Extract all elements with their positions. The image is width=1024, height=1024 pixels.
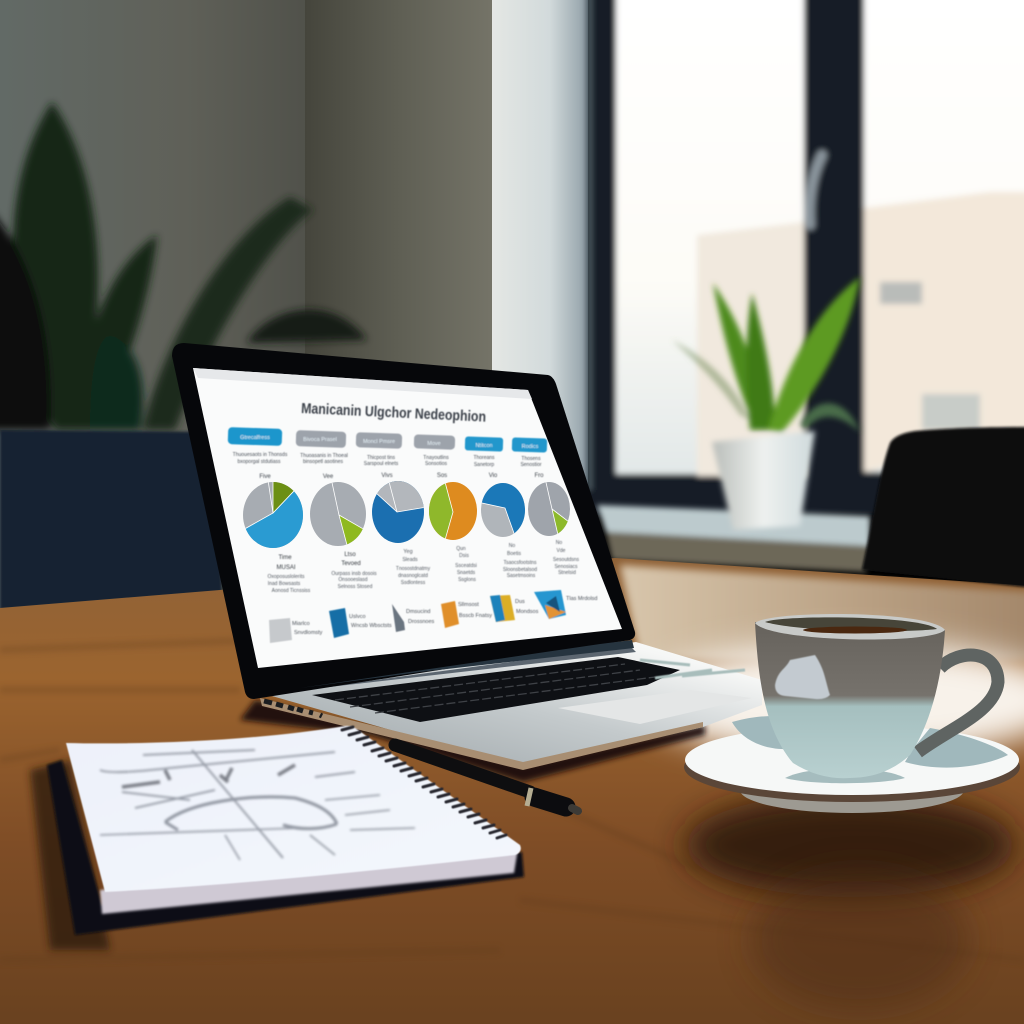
notebook page bbox=[66, 726, 521, 892]
laptop shadow bbox=[240, 700, 705, 782]
pie 6 bbox=[528, 482, 570, 536]
coffee cup and saucer bbox=[684, 614, 1020, 813]
cup reflection bbox=[775, 655, 830, 699]
laptop ports bbox=[264, 701, 322, 716]
pie descriptions: Fro bbox=[534, 473, 544, 479]
hinge bbox=[300, 646, 636, 690]
pie descriptions: Vivs bbox=[381, 473, 393, 479]
pie descriptions: Vio bbox=[489, 473, 498, 479]
icon: orange tile bbox=[441, 601, 459, 628]
window sill bbox=[597, 505, 870, 572]
laptop lid bbox=[172, 343, 635, 699]
cup interior bbox=[765, 617, 937, 631]
pie captions: Sesoutdsns bbox=[553, 557, 580, 563]
keyboard light keys bbox=[640, 660, 745, 678]
pie captions: Ssglons bbox=[458, 577, 476, 583]
pie captions: Stnelsid bbox=[558, 570, 576, 576]
icon: grey tile bbox=[269, 618, 292, 643]
pie descriptions bbox=[233, 452, 544, 480]
icon captions: Tlas Mrdolsd bbox=[566, 596, 597, 602]
window bbox=[586, 0, 1024, 515]
saucer shadow patches bbox=[732, 716, 1008, 768]
pie captions: Sloonsbetalsod bbox=[503, 567, 537, 573]
pie captions: Sleads bbox=[402, 557, 418, 563]
cup handle bbox=[918, 655, 998, 752]
pie descriptions: bxoporgal stdutiass bbox=[237, 459, 281, 465]
pie captions: Tsaocsfootstns bbox=[503, 560, 537, 566]
pie descriptions: Thoreans bbox=[473, 455, 495, 461]
icon: grey sail bbox=[392, 604, 405, 632]
pie captions: Senosiacs bbox=[554, 564, 578, 570]
chair back bbox=[862, 427, 1024, 588]
trackpad bbox=[558, 690, 752, 724]
notebook page edge bbox=[100, 848, 518, 914]
pie 5 bbox=[481, 483, 525, 537]
pie captions: No bbox=[556, 540, 562, 546]
category pills: Ntitcon bbox=[475, 443, 493, 449]
laptop bbox=[172, 343, 762, 770]
category pills bbox=[228, 427, 547, 453]
pie captions: Oxoposuslolerits bbox=[268, 574, 305, 580]
category pills: Moncl Pmsre bbox=[363, 439, 395, 445]
white pot bbox=[712, 431, 815, 530]
cup body bbox=[755, 622, 945, 778]
wooden table bbox=[0, 558, 1024, 1024]
pie captions: Inad Bowsasts bbox=[268, 581, 301, 587]
screen title: Manicanin Ulgchor Nedeophion bbox=[301, 400, 486, 426]
icon: blue tile bbox=[329, 608, 349, 638]
notebook shadow bbox=[30, 760, 110, 950]
pie captions: Selnoss Stosed bbox=[338, 584, 373, 590]
pie captions: Sasetmsoins bbox=[507, 573, 536, 579]
pie descriptions: Sarspoul elnets bbox=[364, 461, 399, 467]
pie captions: Aonosd Ticnssiss bbox=[272, 588, 311, 594]
pie captions: Ssdlontess bbox=[401, 580, 426, 586]
category pills: Gtrecalfress bbox=[240, 435, 270, 441]
pie descriptions: Five bbox=[259, 474, 271, 480]
icon captions: Bsscb Fnatsy bbox=[459, 613, 492, 619]
large plant bbox=[0, 102, 367, 430]
pie captions: Boetis bbox=[507, 551, 521, 557]
category pills: Move bbox=[427, 441, 441, 447]
pie descriptions: Thicpost tins bbox=[367, 455, 396, 461]
pie 1 bbox=[243, 482, 303, 548]
icon captions: Dus bbox=[515, 599, 525, 605]
icon captions: Wncsb Wbsctsts bbox=[351, 623, 392, 629]
pen bbox=[395, 745, 578, 811]
icon captions: Snvdlomsty bbox=[294, 630, 323, 636]
pie descriptions: binsopetl asotines bbox=[303, 459, 344, 465]
cup rim bbox=[755, 614, 945, 640]
pie captions: Tevoed bbox=[341, 561, 361, 567]
pie captions: No bbox=[509, 543, 515, 549]
spiral binding bbox=[342, 727, 506, 838]
pie descriptions: Thosens bbox=[521, 456, 541, 462]
bottom icons row bbox=[269, 590, 597, 643]
icon captions bbox=[292, 596, 597, 636]
pie 2 bbox=[310, 482, 366, 546]
pie captions: Vde bbox=[557, 548, 566, 554]
pie captions: Yeg bbox=[403, 549, 413, 555]
pie 4 bbox=[429, 482, 477, 540]
pie captions bbox=[268, 540, 580, 594]
dark planter bbox=[0, 430, 222, 610]
pie captions: Dsis bbox=[459, 553, 469, 559]
pie descriptions: Sos bbox=[437, 473, 447, 479]
screen bbox=[193, 368, 622, 668]
category pills: Rodics bbox=[522, 444, 539, 450]
pie descriptions: Tnayoutlins bbox=[423, 455, 449, 461]
pie captions: Onsooeslasd bbox=[338, 577, 368, 583]
pie charts bbox=[243, 481, 570, 548]
pie captions: Ssceatdsi bbox=[455, 563, 477, 569]
pie descriptions: Vee bbox=[323, 474, 334, 480]
icon: mosaic tile bbox=[490, 595, 515, 622]
pie descriptions: Thuoasanis in Thoeal bbox=[300, 453, 348, 459]
pie captions: dnasnoglcatd bbox=[398, 573, 428, 579]
lid lower strip bbox=[300, 640, 634, 688]
pie descriptions: Sanetorp bbox=[474, 462, 494, 468]
pie captions: MUSAI bbox=[276, 565, 296, 571]
laptop base bbox=[258, 642, 762, 770]
notebook bbox=[47, 726, 524, 935]
small potted plant bbox=[672, 277, 860, 530]
category pills: Bivoca Prasel bbox=[303, 437, 337, 443]
pie descriptions: Thuouesaots in Thonsds bbox=[233, 452, 288, 458]
pie captions: Snaetds bbox=[457, 570, 476, 576]
pencil sketch bbox=[100, 750, 415, 860]
notebook cover bbox=[47, 760, 524, 935]
icon captions: Uslvco bbox=[349, 614, 366, 620]
background wall bbox=[0, 0, 588, 620]
saucer bbox=[684, 716, 1020, 813]
icon captions: Miarlco bbox=[292, 621, 310, 627]
icon captions: Drossnoes bbox=[408, 619, 435, 625]
coffee bbox=[803, 626, 907, 634]
icon captions: Mondsos bbox=[516, 609, 539, 615]
icon captions: Dmsucind bbox=[406, 609, 430, 615]
pie descriptions: Sonsotios bbox=[425, 461, 447, 467]
icon: mosaic diamond bbox=[534, 590, 566, 619]
pie captions: Qun bbox=[456, 546, 466, 552]
pie captions: Ltso bbox=[344, 552, 356, 558]
pie captions: Time bbox=[278, 555, 292, 561]
pie descriptions: Senostior bbox=[520, 462, 542, 468]
pie captions: Ourpass insb dosois bbox=[331, 571, 377, 577]
icon captions: Sllmsost bbox=[458, 602, 479, 608]
pie captions: Tnosostdnatmy bbox=[396, 566, 431, 572]
pie 3 bbox=[372, 481, 424, 543]
keyboard bbox=[312, 657, 680, 722]
